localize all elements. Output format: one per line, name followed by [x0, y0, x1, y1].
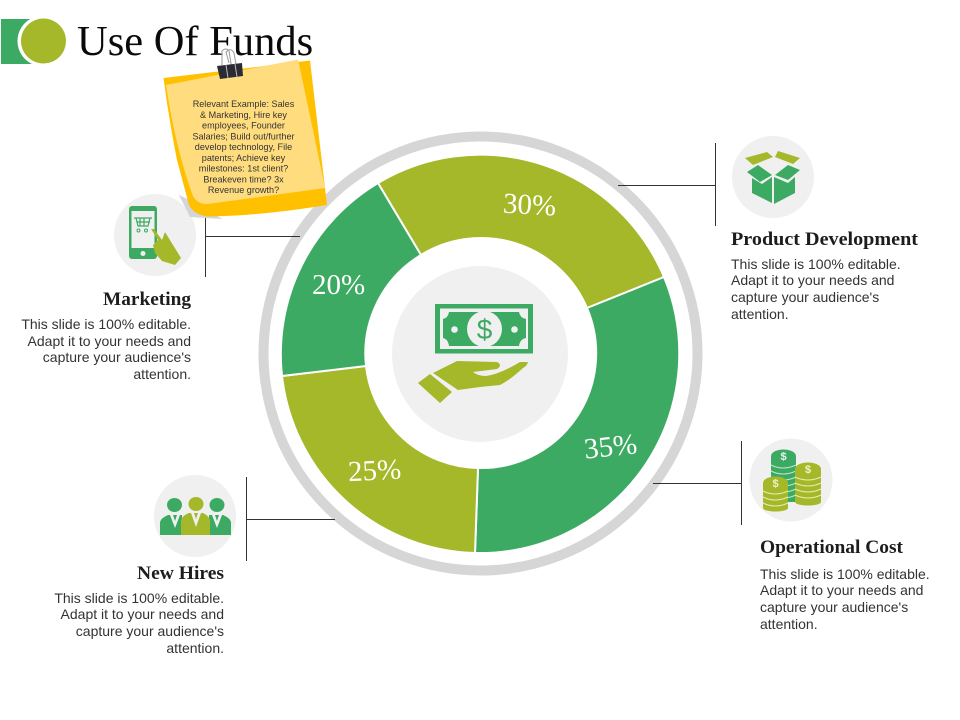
text: new hires: attention. [166, 640, 224, 656]
text: product development: attention. [731, 306, 789, 322]
sticky note [164, 49, 327, 219]
right olive stack: $ [805, 464, 811, 476]
note text: Revenue growth? [208, 185, 279, 195]
text: operational cost [760, 566, 930, 632]
text: marketing: This slide is 100% editable. [21, 316, 191, 332]
outer ring [264, 136, 698, 570]
icon: new hires team [154, 475, 236, 557]
heading: new hires: New Hires [137, 563, 224, 584]
text: new hires: This slide is 100% editable. [54, 590, 224, 606]
text: marketing: attention. [133, 366, 191, 382]
icon: marketing phone [114, 194, 196, 276]
note text: patents; Achieve key [202, 153, 286, 163]
connector: marketing [206, 215, 300, 277]
note front [166, 60, 325, 204]
title: Use Of Funds [77, 18, 313, 65]
label: 30%: 30% [502, 188, 557, 222]
connector: new hires [246, 477, 335, 561]
text: new hires: Adapt it to your needs and [61, 606, 224, 622]
text: operational cost: Adapt it to your needs and [760, 582, 923, 598]
heading: product development: Product Development [731, 229, 919, 250]
text: new hires: capture your audience's [76, 623, 224, 639]
slice: 25% [282, 366, 478, 553]
slice: 20% [281, 183, 421, 376]
label: 20%: 20% [312, 269, 365, 301]
note shadow [179, 195, 222, 219]
panel: product development [731, 136, 919, 322]
connector: product development [618, 143, 716, 226]
text: marketing [21, 316, 191, 382]
note text: develop technology, File [195, 142, 292, 152]
left olive stack: $ [772, 478, 779, 490]
icon: open box [732, 136, 814, 218]
note text: Relevant Example: Sales [193, 99, 295, 109]
title icon [1, 16, 68, 66]
note text: milestones: 1st client? [199, 164, 288, 174]
text: product development: This slide is 100% editable. [731, 256, 901, 272]
slice: 30% [378, 155, 664, 308]
binder clip [217, 49, 243, 79]
note back [164, 60, 327, 216]
label: 25%: 25% [347, 454, 402, 488]
center circle [392, 266, 568, 442]
panel: operational cost [750, 438, 930, 632]
donut chart [281, 155, 679, 553]
slice: 35% [475, 277, 679, 553]
heading: operational cost: Operational Cost [760, 537, 904, 558]
text: operational cost: This slide is 100% editable. [760, 566, 930, 582]
hand [418, 361, 528, 403]
text: marketing: capture your audience's [43, 349, 191, 365]
icon: money in hand [418, 304, 533, 403]
icon: coin stacks [750, 438, 832, 522]
banknote: $ [477, 314, 493, 345]
text: marketing: Adapt it to your needs and [28, 333, 191, 349]
note text: employees, Founder [202, 120, 285, 130]
heading: marketing: Marketing [103, 289, 192, 310]
text: product development: Adapt it to your needs and [731, 272, 894, 288]
note text [192, 99, 295, 195]
note text: Breakeven time? 3x [203, 174, 284, 184]
text: product development [731, 256, 901, 322]
text: new hires [54, 590, 224, 656]
text: operational cost: attention. [760, 616, 818, 632]
connector: operational cost [653, 441, 742, 525]
note text: & Marketing, Hire key [200, 110, 287, 120]
green stack: $ [780, 451, 787, 463]
label: 35%: 35% [582, 428, 639, 466]
panel: new hires [54, 475, 236, 656]
text: product development: capture your audience's [731, 289, 879, 305]
text: operational cost: capture your audience's [760, 599, 908, 615]
panel: marketing [21, 289, 192, 382]
note text: Salaries; Build out/further [192, 132, 295, 142]
